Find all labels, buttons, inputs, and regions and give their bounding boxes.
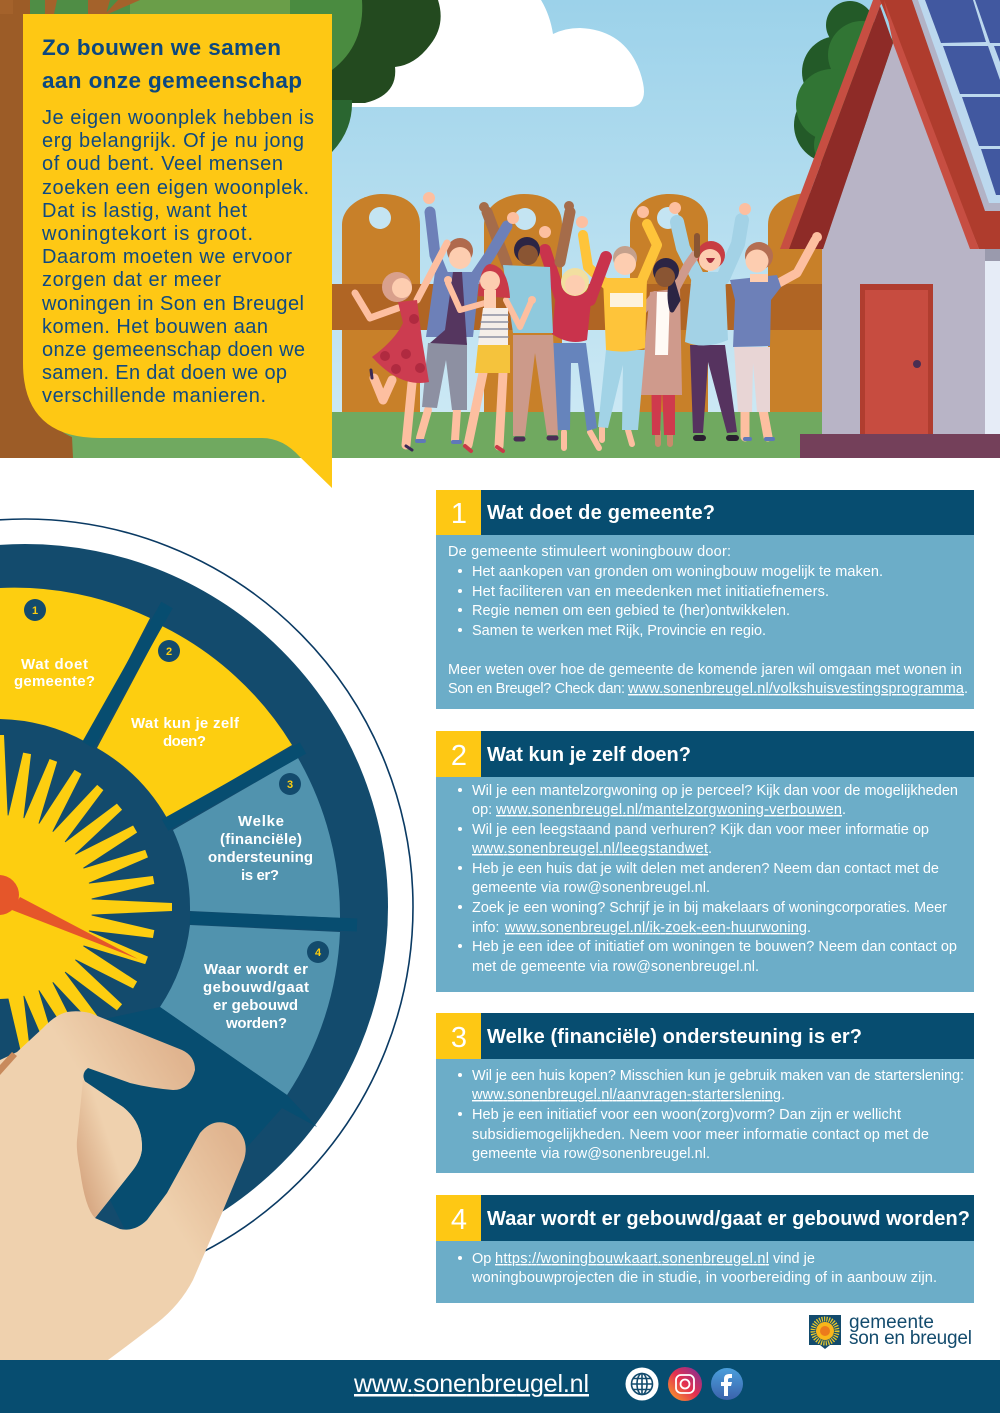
heading: Zo bouwen we samen: [42, 35, 281, 60]
panel 2: [436, 731, 974, 992]
text: www.sonenbreugel.nl/aanvragen-starterslening: [471, 1087, 781, 1103]
person: red dress: [355, 243, 447, 450]
badge 2: [158, 640, 180, 662]
text: gemeente via row@sonenbreugel.nl.: [472, 1146, 710, 1162]
text: Op: [472, 1251, 491, 1267]
logo: son en breugel: [849, 1328, 972, 1349]
wheel label 3: is er?: [241, 867, 279, 884]
wheel label 4: Waar wordt er: [204, 961, 308, 978]
text: met de gemeente via row@sonenbreugel.nl.: [472, 959, 759, 975]
intro text: onze gemeenschap doen we: [42, 339, 305, 361]
heading: Wat kun je zelf doen?: [487, 744, 691, 766]
text: [458, 1251, 937, 1286]
pointer: [0, 875, 138, 959]
intro text: of oud bent. Veel mensen: [42, 153, 283, 175]
cuff detail: [0, 1052, 17, 1075]
footer bar: [0, 1360, 1000, 1413]
shield: [809, 1315, 841, 1349]
heading: Waar wordt er gebouwd/gaat er gebouwd worden?: [487, 1208, 970, 1230]
panel 3: 3: [451, 1022, 467, 1054]
person: blue tee: [730, 232, 822, 439]
segment 1: [0, 588, 150, 742]
wheel label 2: [131, 715, 240, 750]
heading: [42, 35, 302, 93]
sky: [332, 0, 1000, 412]
intro text: zorgen dat er meer: [42, 269, 221, 291]
intro text: Daarom moeten we ervoor: [42, 246, 292, 268]
text: woningbouwprojecten die in studie, in voorbereiding of in aanbouw zijn.: [471, 1270, 937, 1286]
text: op:: [472, 802, 492, 818]
heading: aan onze gemeenschap: [42, 68, 302, 93]
segment 4: [160, 925, 340, 1095]
person: blue jacket: [417, 192, 519, 442]
text: Heb je een initiatief voor een woon(zorg)vorm? Dan zijn er wellicht: [472, 1107, 901, 1123]
wheel label 3: [208, 813, 313, 884]
text: .: [842, 802, 846, 818]
cloud: [332, 0, 644, 107]
wheel label 3: ondersteuning: [208, 849, 313, 866]
spokes: [88, 605, 357, 925]
text: [448, 544, 968, 697]
wheel label 2: doen?: [163, 733, 206, 750]
person: light blue sweater: [669, 202, 751, 438]
text: vind je: [773, 1251, 815, 1267]
person: striped top: [444, 264, 536, 451]
person: yellow sweater: [576, 206, 657, 444]
heading: Wat doet de gemeente?: [487, 502, 715, 524]
text: Wil je een huis kopen? Misschien kun je gebruik maken van de starterslening:: [472, 1068, 964, 1084]
text: Son en Breugel? Check dan:: [448, 681, 625, 697]
sun: [0, 735, 172, 1062]
doorstep: [800, 434, 1000, 458]
tree trunk: [0, 0, 73, 458]
segment 2: [97, 626, 292, 818]
house: [780, 0, 1000, 458]
icon: globe: [626, 1368, 658, 1400]
text: [458, 1068, 964, 1162]
intro text: Je eigen woonplek hebben is: [42, 107, 314, 129]
text: subsidiemogelijkheden. Neem voor meer informatie contact op met de: [472, 1127, 929, 1143]
text: Wil je een mantelzorgwoning op je perceel? Kijk dan voor de mogelijkheden: [472, 783, 958, 799]
wheel label 4: worden?: [225, 1015, 287, 1032]
intro text: zoeken een eigen woonplek.: [42, 177, 309, 199]
text: .: [964, 681, 968, 697]
badge 4: [307, 941, 329, 963]
text: .: [708, 841, 712, 857]
text: info:: [472, 920, 499, 936]
palm shading: [77, 1080, 142, 1218]
text: .: [781, 1087, 785, 1103]
tree behind house: [794, 1, 896, 173]
person: light blue polo: [479, 201, 574, 439]
wheel label 3: Welke: [238, 813, 284, 830]
lower band: [60, 1007, 317, 1240]
heading: Welke (financiële) ondersteuning is er?: [487, 1026, 862, 1048]
grass: [0, 412, 1000, 458]
fence: [332, 193, 830, 412]
text: www.sonenbreugel.nl/ik-zoek-een-huurwoning: [504, 920, 807, 936]
text: Heb je een idee of initiatief om woningen te bouwen? Neem dan contact op: [472, 939, 957, 955]
badge 1: 1: [32, 605, 38, 617]
wheel label 1: [14, 656, 95, 690]
wheel label 4: gebouwd/gaat: [203, 979, 309, 996]
icon: facebook: [711, 1368, 743, 1400]
badge 1: [24, 599, 46, 621]
badge 3: 3: [287, 779, 293, 791]
wheel label 1: Wat doet: [21, 656, 88, 673]
speech bubble: [23, 14, 332, 488]
intro text: verschillende manieren.: [42, 385, 266, 407]
solar panels: [925, 0, 1000, 195]
person: beige coat: [617, 236, 697, 444]
roof: [780, 0, 884, 249]
door: [860, 284, 933, 434]
wheel label 2: Wat kun je zelf: [131, 715, 240, 732]
panel 1: 1: [451, 498, 467, 530]
wheel: [0, 519, 413, 1295]
badge 3: [279, 773, 301, 795]
hero illustration: [0, 0, 1000, 458]
person: red sweater: [539, 226, 606, 448]
text: Regie nemen om een gebied te (her)ontwikkelen.: [472, 603, 790, 619]
text: Meer weten over hoe de gemeente de komende jaren wil omgaan met wonen in: [448, 662, 962, 678]
logo sun: [813, 1319, 837, 1343]
left tree canopy: [0, 0, 441, 152]
intro text: [41, 107, 314, 407]
panel 3: [436, 1013, 974, 1173]
text: www.sonenbreugel.nl/volkshuisvestingsprogramma: [627, 681, 965, 697]
website link: www.sonenbreugel.nl: [353, 1370, 589, 1398]
panel 1: [436, 490, 974, 709]
intro text: samen. En dat doen we op: [42, 362, 287, 384]
outer thin ring: [0, 519, 413, 1295]
intro text: erg belangrijk. Of je nu jong: [42, 130, 304, 152]
text: Het faciliteren van en meedenken met initiatiefnemers.: [472, 584, 829, 600]
group of people: [355, 192, 822, 451]
logo: gemeente: [849, 1312, 934, 1333]
intro text: komen. Het bouwen aan: [42, 316, 268, 338]
text: Heb je een huis dat je wilt delen met anderen? Neem dan contact met de: [472, 861, 939, 877]
icon: instagram: [668, 1367, 702, 1401]
text: Het aankopen van gronden om woningbouw mogelijk te maken.: [472, 564, 883, 580]
panel 4: 4: [451, 1204, 467, 1236]
text: Wil je een leegstaand pand verhuren? Kijk dan voor meer informatie op: [472, 822, 929, 838]
badge 2: 2: [166, 646, 172, 658]
panel 2: 2: [451, 740, 467, 772]
wheel label 1: gemeente?: [14, 673, 95, 690]
wheel disc: [0, 544, 388, 1270]
hand: [0, 1011, 246, 1360]
wheel label 4: [203, 961, 309, 1032]
text: De gemeente stimuleert woningbouw door:: [448, 544, 731, 560]
intro text: woningen in Son en Breugel: [41, 293, 304, 315]
text: [458, 783, 958, 975]
text: .: [807, 920, 811, 936]
text: www.sonenbreugel.nl/leegstandwet: [471, 841, 708, 857]
segment 3: [173, 758, 340, 918]
wheel label 4: er gebouwd: [213, 997, 298, 1014]
branches: [0, 0, 140, 14]
intro text: woningtekort is groot.: [41, 223, 253, 245]
intro text: Dat is lastig, want het: [42, 200, 247, 222]
text: www.sonenbreugel.nl/mantelzorgwoning-verbouwen: [495, 802, 842, 818]
logo: [809, 1312, 972, 1349]
badge 4: 4: [315, 947, 322, 959]
panel 4: [436, 1195, 974, 1303]
text: https://woningbouwkaart.sonenbreugel.nl: [495, 1251, 769, 1267]
text: gemeente via row@sonenbreugel.nl.: [472, 880, 710, 896]
text: Zoek je een woning? Schrijf je in bij makelaars of woningcorporaties. Meer: [472, 900, 947, 916]
wheel label 3: (financiële): [220, 831, 302, 848]
text: Samen te werken met Rijk, Provincie en regio.: [472, 623, 766, 639]
